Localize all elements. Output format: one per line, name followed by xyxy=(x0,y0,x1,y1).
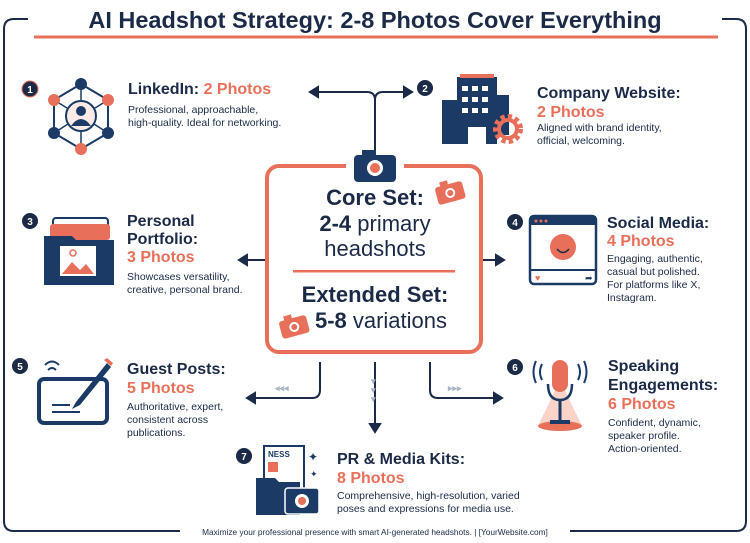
item 3: Personal Portfolio xyxy=(22,213,243,296)
item 6: Speaking Engagements: Action-oriented. xyxy=(608,443,682,455)
item 5: Guest Posts: Guest Posts: xyxy=(127,361,226,378)
item 4: Social Media: For platforms like X, xyxy=(607,279,700,291)
item 4: Social Media: Engaging, authentic, xyxy=(607,253,703,265)
item 4: Social Media: Social Media: xyxy=(607,215,709,232)
item 4: Social Media: ➦ xyxy=(585,273,593,283)
item 2: Company Website: 2 xyxy=(422,84,428,95)
item 7: PR & Media Kits xyxy=(236,446,520,515)
item 5: Guest Posts: publications. xyxy=(127,427,185,439)
item 7: PR & Media Kits: 7 xyxy=(241,452,247,463)
item 6: Speaking Engagements: Confident, dynamic, xyxy=(608,417,701,429)
item 1: LinkedIn: high-quality. Ideal for networking. xyxy=(128,117,281,129)
icon: small cameras xyxy=(433,177,466,205)
item 5: Guest Posts: consistent across xyxy=(127,414,208,426)
item 6: Speaking Engagements: speaker profile. xyxy=(608,430,680,442)
small chevrons: ▾ xyxy=(370,376,376,386)
item 4: Social Media: 4 Photos xyxy=(607,233,675,250)
item 4: Social Media: 4 xyxy=(512,218,518,229)
item 7: PR & Media Kits: Comprehensive, high-resolution, varied xyxy=(337,490,520,502)
small chevrons: ▸▸▸ xyxy=(447,383,462,393)
item 7: PR & Media Kits: PR & Media Kits: xyxy=(337,451,465,468)
center box: Extended Set: xyxy=(302,282,448,307)
small chevrons: ◂◂◂ xyxy=(274,383,289,393)
item 3: Personal Portfolio: 3 xyxy=(27,217,33,228)
item 5: Guest Posts: 5 xyxy=(17,362,23,373)
center box: 2-4 primary xyxy=(319,211,431,236)
item 3: Personal Portfolio: 3 Photos xyxy=(127,249,195,266)
title: AI Headshot Strategy: 2-8 Photos Cover Everything xyxy=(88,7,662,33)
center box: headshots xyxy=(324,236,426,261)
item 4: Social Media: ♥ xyxy=(535,273,540,283)
item 3: Personal Portfolio: Showcases versatility, xyxy=(127,271,230,283)
item 1: LinkedIn: 1 xyxy=(27,85,33,96)
item 1: LinkedIn: Professional, approachable, xyxy=(128,104,258,116)
item 6: Speaking Engagements: Speaking xyxy=(608,358,679,375)
item 2: Company Website: Aligned with brand identity, xyxy=(537,122,662,134)
center box: 5-8 variations xyxy=(315,308,447,333)
item 2: Company Website: official, welcoming. xyxy=(537,135,625,147)
item 3: Personal Portfolio: Personal xyxy=(127,213,195,230)
item 3: Personal Portfolio: Portfolio: xyxy=(127,231,198,248)
item 5: Guest Posts: 5 Photos xyxy=(127,380,195,397)
item 4: Social Media: casual but polished. xyxy=(607,266,700,278)
item 2: Company Website: 2 Photos xyxy=(537,104,605,121)
item 1: LinkedIn xyxy=(22,78,281,155)
small chevrons xyxy=(274,376,462,404)
item 7: PR & Media Kits: ✦ xyxy=(310,469,318,479)
center box xyxy=(267,150,481,352)
item 7: PR & Media Kits: ✦ xyxy=(308,450,318,464)
item 6: Speaking Engagements: 6 xyxy=(512,363,518,374)
footer: Maximize your professional presence with smart AI-generated headshots. | [YourWebsite.com] xyxy=(202,527,548,537)
small chevrons: ▾ xyxy=(370,385,376,395)
item 3: Personal Portfolio: creative, personal brand. xyxy=(127,284,243,296)
center box: Core Set: xyxy=(326,185,424,210)
item 7: PR & Media Kits: poses and expressions for media use. xyxy=(337,503,514,515)
item 6: Speaking Engagements xyxy=(507,358,718,455)
item 5: Guest Posts: Authoritative, expert, xyxy=(127,401,223,413)
icon: camera top xyxy=(354,150,396,182)
connector arrows xyxy=(239,87,504,432)
item 6: Speaking Engagements: Engagements: xyxy=(608,377,718,394)
small chevrons: ▾ xyxy=(370,394,376,404)
title xyxy=(34,7,718,38)
item 1: LinkedIn: LinkedIn: 2 Photos xyxy=(128,81,271,98)
item 7: PR & Media Kits: NESS xyxy=(268,450,290,459)
item 5: Guest Posts xyxy=(12,358,226,439)
item 4: Social Media xyxy=(507,214,709,304)
item 6: Speaking Engagements: 6 Photos xyxy=(608,396,676,413)
item 7: PR & Media Kits: 8 Photos xyxy=(337,470,405,487)
item 2: Company Website xyxy=(417,74,681,147)
item 2: Company Website: Company Website: xyxy=(537,85,681,102)
item 4: Social Media: Instagram. xyxy=(607,292,657,304)
